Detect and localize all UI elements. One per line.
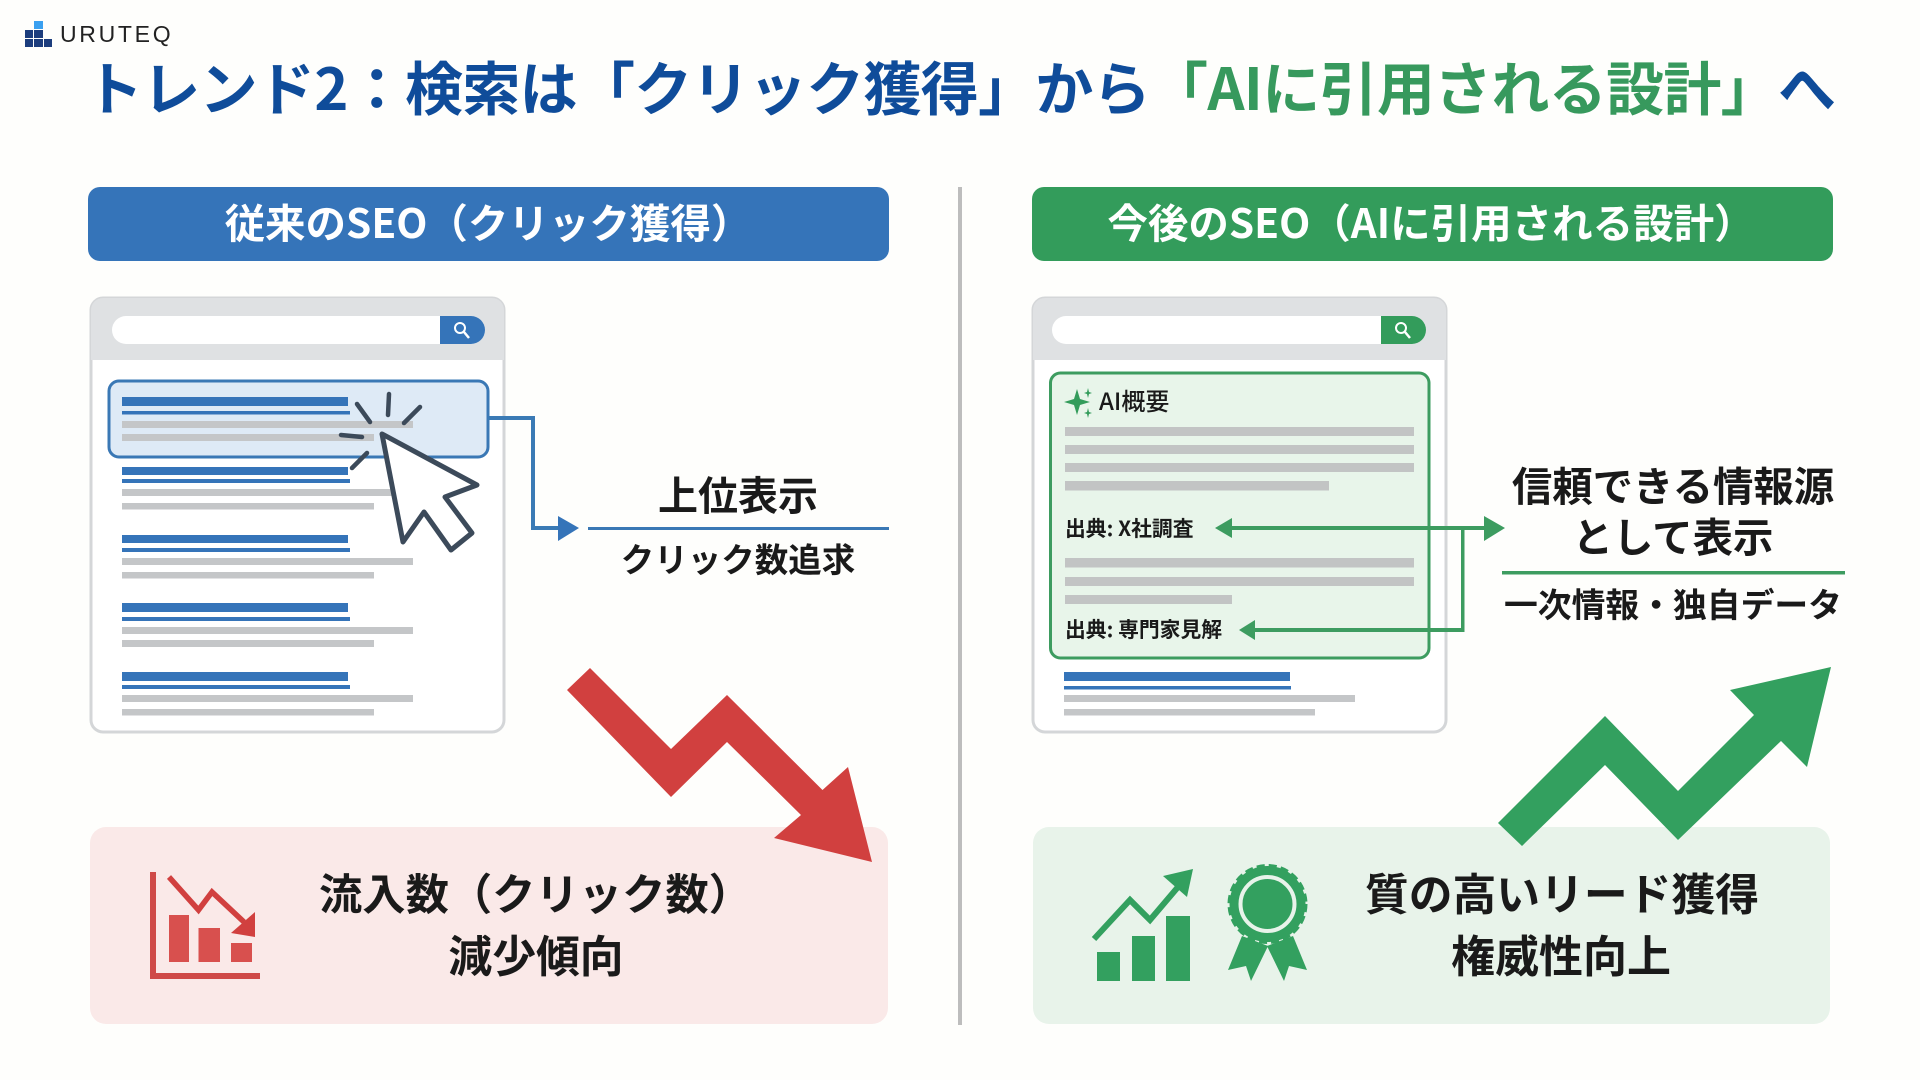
label: trusted source: として表示: [1573, 505, 1773, 564]
icon: growth chart: [1094, 869, 1193, 981]
label: top ranking: [588, 464, 889, 582]
result row 3: [122, 535, 413, 578]
text: traffic decline: 流入数（クリック数）: [319, 861, 752, 923]
result row 2: [122, 467, 413, 510]
icon: sparkle: [1064, 388, 1092, 418]
text: quality leads: 権威性向上: [1451, 921, 1671, 985]
panel: search results browser: [91, 298, 504, 732]
title: トレンド2：検索は「クリック獲得」から「AIに引用される設計」へ: [85, 43, 1836, 127]
header: future SEO: [1032, 187, 1833, 261]
label: top ranking: クリック数追求: [621, 533, 855, 582]
label: top ranking: 上位表示: [658, 464, 818, 522]
result row: [1064, 672, 1355, 716]
header: conventional SEO: 従来のSEO（クリック獲得）: [225, 191, 751, 250]
search bar: [1052, 316, 1426, 344]
panel: quality leads: [1033, 827, 1830, 1024]
text: quality leads: [1365, 859, 1759, 985]
panel: traffic decline: [90, 827, 888, 1024]
arrow: top result to label: [488, 418, 579, 541]
highlighted top result: [109, 381, 488, 457]
AI overview box: AI概要: [1099, 382, 1169, 417]
panel: AI overview browser: [1033, 298, 1446, 732]
logo: URUTEQ: URUTEQ: [60, 21, 173, 47]
text: traffic decline: [319, 861, 752, 985]
icon: mouse cursor: [382, 434, 477, 550]
header: conventional SEO: [88, 187, 889, 261]
arrow: green upward: [1498, 667, 1831, 846]
AI overview box: [1050, 373, 1429, 658]
text: traffic decline: 減少傾向: [448, 921, 624, 985]
icon: award badge: [1228, 866, 1307, 981]
label: trusted source: [1502, 454, 1845, 627]
text: quality leads: 質の高いリード獲得: [1365, 859, 1759, 923]
icon: declining chart: [150, 872, 260, 979]
header: future SEO: 今後のSEO（AIに引用される設計）: [1107, 191, 1755, 250]
icon: click sparks: [341, 394, 420, 468]
AI overview box: 出典: X社調査: [1065, 512, 1194, 542]
AI overview box: 出典: 専門家見解: [1065, 613, 1222, 643]
result row 4: [122, 603, 413, 647]
result row 5: [122, 672, 413, 716]
arrow: citations to trusted source: [1215, 516, 1505, 640]
search bar: [112, 316, 485, 344]
arrow: red downward: [567, 668, 872, 862]
label: trusted source: 信頼できる情報源: [1512, 454, 1834, 513]
label: trusted source: 一次情報・独自データ: [1504, 578, 1842, 627]
